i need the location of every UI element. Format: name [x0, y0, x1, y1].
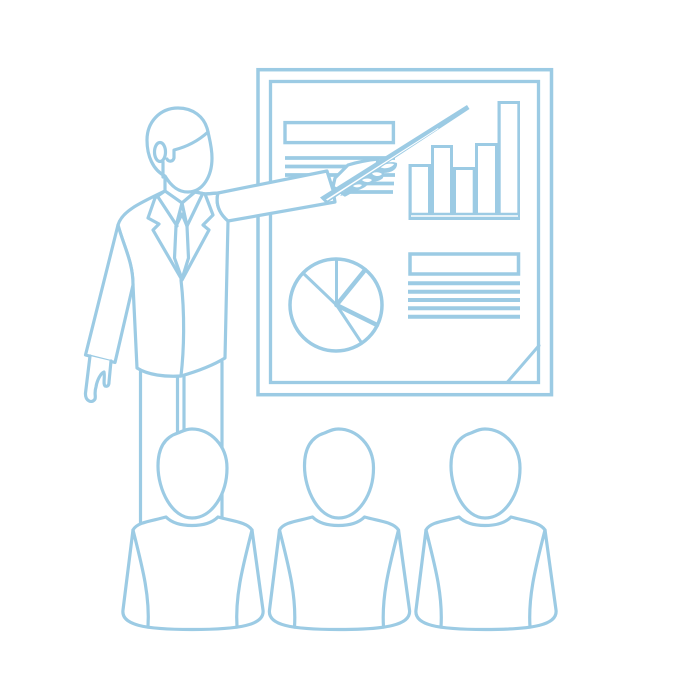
hanging arm	[86, 225, 133, 362]
heading box: lower right	[410, 254, 518, 274]
text lines: lower right	[408, 283, 520, 317]
audience member: right	[416, 429, 556, 630]
pointing hand	[333, 159, 397, 196]
hanging hand	[85, 356, 111, 401]
pointing arm	[205, 171, 335, 221]
audience member: left	[123, 429, 263, 630]
presentation board	[258, 70, 552, 395]
presenter legs	[140, 362, 222, 530]
fingers	[340, 162, 397, 196]
palm	[333, 159, 378, 195]
jacket centre line	[181, 280, 184, 376]
ear	[154, 142, 166, 162]
finger highlights	[353, 164, 394, 187]
audience member: centre	[269, 429, 410, 630]
bar chart	[408, 101, 520, 220]
lapels and tie	[148, 191, 213, 280]
pointer stick	[320, 105, 470, 204]
heading box: top left	[285, 123, 393, 143]
pie chart	[290, 259, 382, 351]
suit jacket	[118, 191, 228, 376]
hair line	[167, 132, 208, 161]
presenter suit and arms	[85, 108, 335, 401]
text lines: top left	[285, 158, 395, 192]
head	[147, 108, 212, 192]
